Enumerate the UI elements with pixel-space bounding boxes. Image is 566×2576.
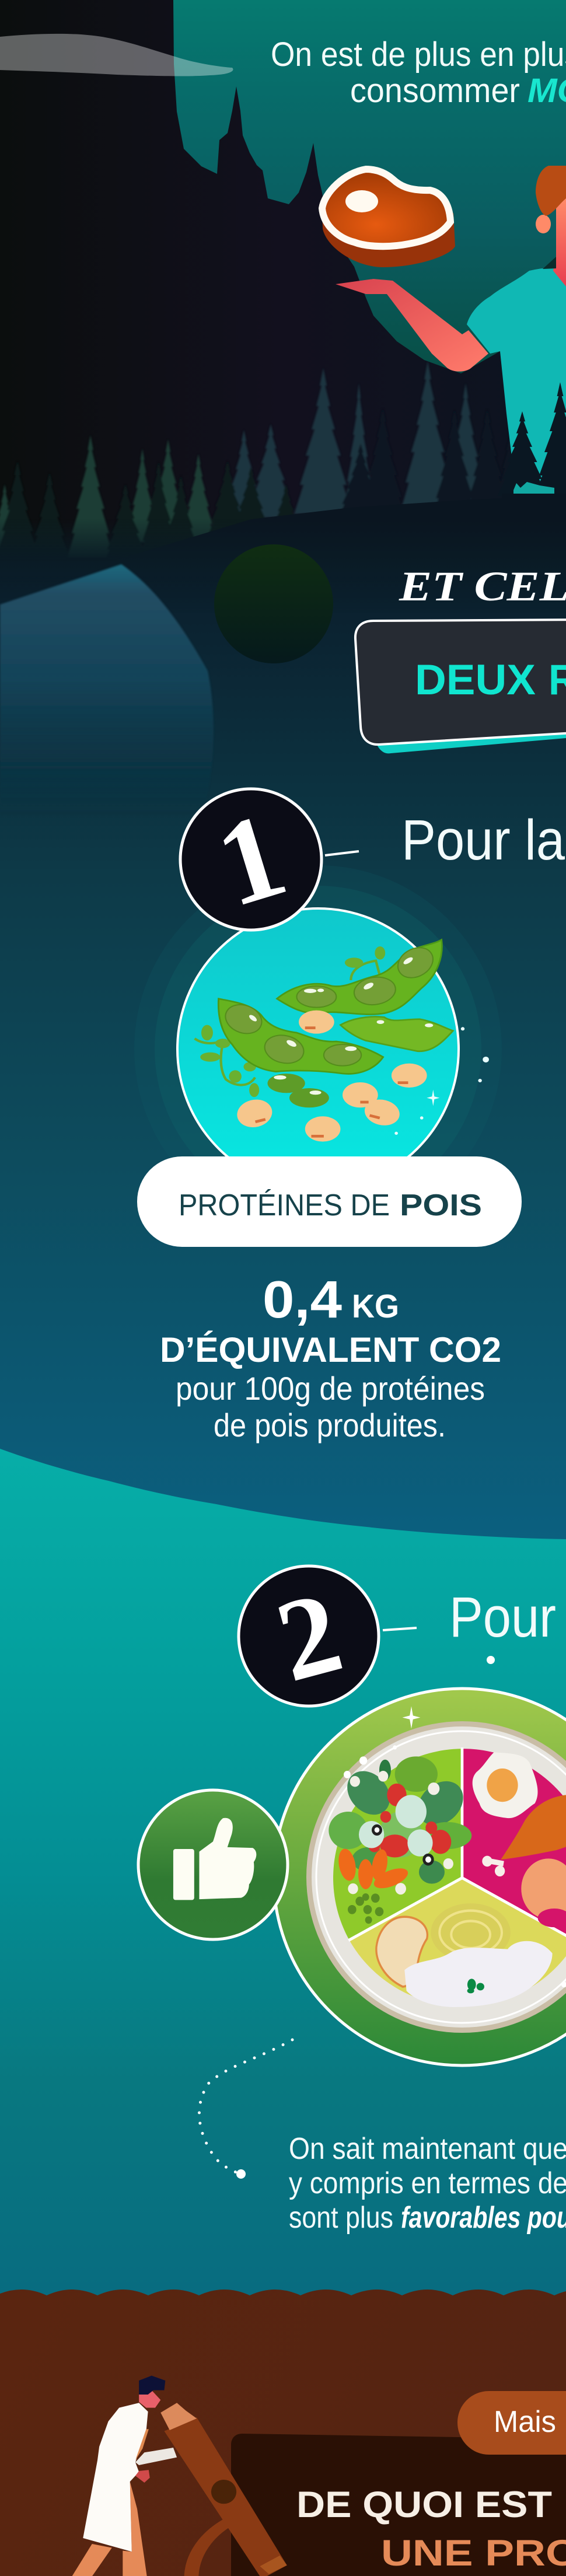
pill word: Mais [494,2405,556,2439]
steak top [322,169,450,246]
steak marrow [345,190,378,212]
green ball [214,544,333,663]
grass tufts [513,482,554,494]
dark front trees [0,461,306,578]
dotted arrow [199,2040,292,2179]
yellow beans [234,1011,427,1142]
equivalent label: D’ÉQUIVALENT CO2 [160,1330,501,1369]
pod upper [277,940,442,1015]
panel: deux raisons [355,620,566,753]
pea drawing [195,940,489,1142]
front leg [123,2481,147,2576]
chicken leg [501,1795,566,1860]
vines [195,961,380,1085]
bread [376,1917,427,1987]
pill: protéines de pois [137,1156,522,1247]
sparkles and dots [394,1027,489,1135]
heading: une pro: UNE PRO [381,2533,566,2574]
plate white line [316,1731,566,2023]
microscope tip [260,2556,287,2574]
green ring [274,1689,566,2065]
pill shape [457,2391,566,2455]
pod lower-right [340,1016,453,1051]
ear [536,215,551,233]
tomatoes [369,1784,451,1858]
face [139,2390,160,2408]
illustration: scientist with microscope [71,2376,287,2576]
sector starches [349,1878,566,2006]
pill label: PROTÉINES DE [179,1189,390,1222]
icon: thumbs up [138,1790,288,1939]
intro line 2: consommer [350,72,520,110]
lab coat [83,2403,148,2551]
olives [373,1826,432,1864]
peas [348,1893,383,1924]
dot under heading [487,1656,495,1664]
microscope eyepiece [160,2403,197,2430]
sector proteins [462,1749,566,1942]
heading: de quoi est: DE QUOI EST [296,2484,552,2525]
pill: mais [457,2391,566,2455]
connector [325,851,359,855]
bean highlights [248,956,433,1095]
arrow end dot [236,2169,246,2179]
steak side [322,210,455,267]
pod left [218,999,383,1074]
sleeve [135,2448,177,2465]
plate rim [306,1721,566,2033]
dark rock silhouette [0,0,566,566]
trees in front of man [497,382,566,511]
salmon notch [538,1909,566,1927]
body line 3: sont plus [289,2201,393,2235]
egg yolk [487,1768,518,1802]
number badge 2 [239,1566,417,1707]
vine leaves [200,946,385,1097]
microscope body [164,2417,287,2576]
bean hilums [255,1026,408,1138]
rice [404,1941,553,2007]
shirt [467,268,566,496]
man holding a steak [322,166,566,496]
panel word: DEUX [415,656,536,704]
forest floor on the right [88,495,566,569]
numeral 2: 2 [264,1567,354,1707]
beans in pods [221,942,439,1067]
unit: KG [352,1288,399,1325]
chicken bone [482,1856,505,1876]
pill shape [137,1156,522,1247]
microscope knob [211,2480,236,2504]
salad leaves [329,1756,471,1884]
rim sparkles [344,1745,566,1987]
planet [0,564,214,823]
pale green trees [0,435,216,558]
front conifers [497,382,566,499]
loose green beans [267,1074,329,1107]
cucumbers [359,1795,433,1857]
panel box [355,620,566,745]
description line 1: pour 100g de protéines [176,1370,485,1407]
circle halo: peas [134,865,502,1233]
illustration: peas in a circle [177,908,489,1190]
value: 0,4 [263,1271,342,1329]
heading: et cela: ET CEL [399,563,566,610]
arm and hand [336,279,488,372]
tie [135,2429,149,2460]
foreground soil [502,494,566,511]
sparkle on ring [403,1706,420,1729]
dotted path [199,2040,292,2174]
pea circle [177,908,459,1190]
microscope arc [191,2521,231,2576]
statistic text block [160,1271,501,1443]
salmon [521,1858,566,1919]
thumb glyph [173,1818,256,1900]
pasta [431,1903,511,1962]
forest illustration [0,361,531,578]
hand [135,2470,150,2483]
sector dividers [348,1747,566,1941]
neck and face [553,193,566,286]
back leg [71,2544,112,2576]
badge circle [180,789,322,930]
smoke cloud [0,34,233,76]
carrots [336,1847,410,1892]
sector vegetables [333,1749,462,1940]
number badge 1 [180,787,359,932]
dark right trees [337,408,531,520]
panel teal shadow [375,729,566,753]
ground fade under the forest [0,519,566,613]
connector [383,1628,417,1630]
dark lower panel [231,2434,566,2576]
heading 2: Pour [449,1585,556,1649]
description line 2: de pois produites. [214,1407,446,1443]
main intro text [271,36,566,110]
plate surface [312,1726,566,2028]
pill label bold: POIS [400,1189,482,1222]
pale blue trees [223,361,486,523]
badge circle [138,1790,288,1939]
herb [467,1979,484,1993]
plate contents [329,1706,566,2007]
body text [289,2132,566,2235]
brown section background [0,2290,566,2576]
mushrooms [348,1771,453,1895]
teal section 2 background [0,1449,566,2311]
hair [139,2376,165,2395]
illustration: balanced plate [274,1689,566,2065]
fried egg [473,1752,537,1818]
numeral 1: 1 [202,787,299,932]
badge circle [239,1566,379,1706]
collar shadow [543,257,556,269]
hair [536,166,566,216]
